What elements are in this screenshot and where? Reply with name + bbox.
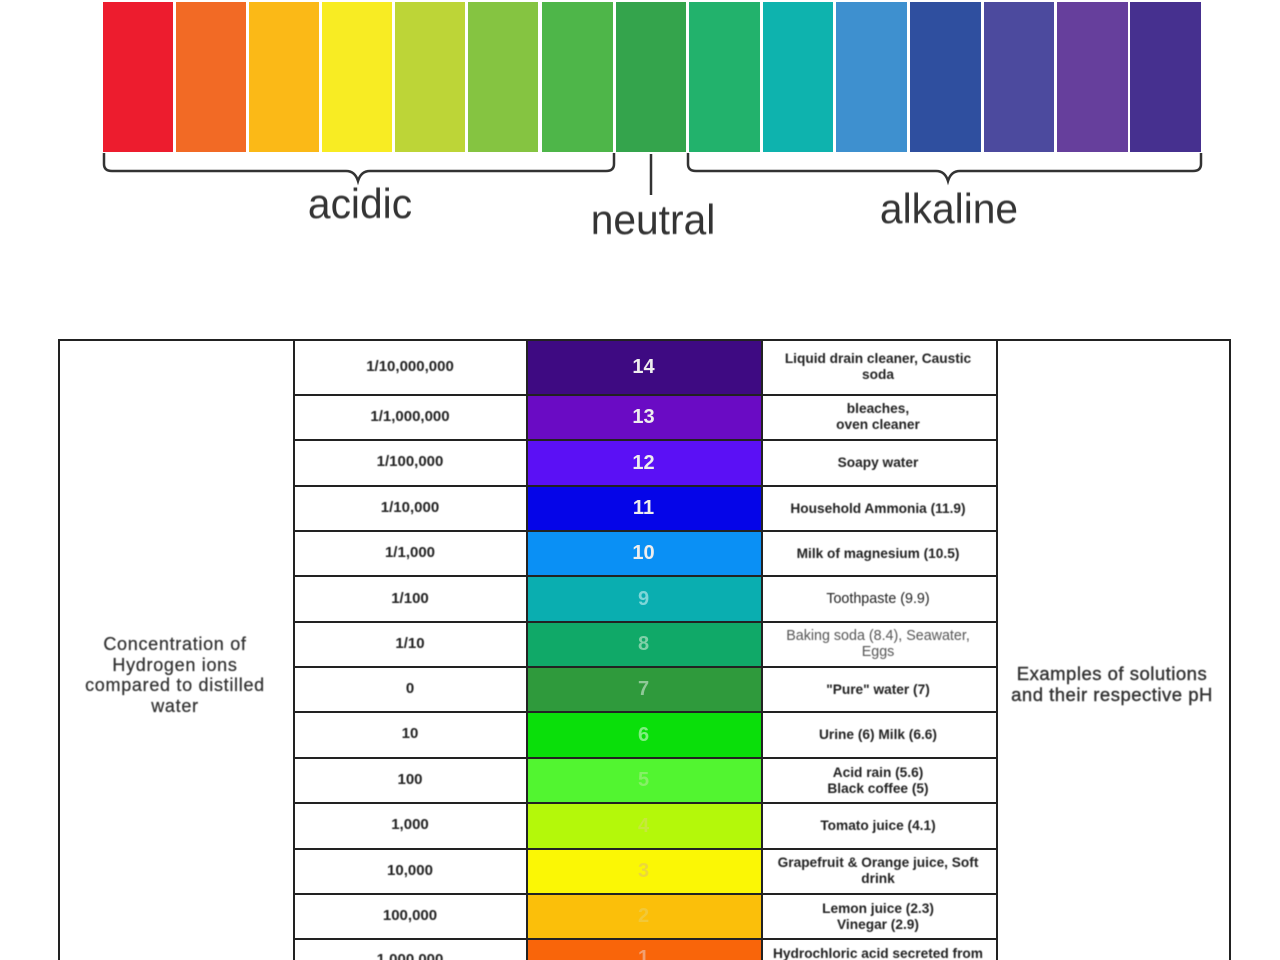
pH table: [58, 339, 1231, 960]
pH table: Eggs: [862, 644, 894, 660]
pH table: Acid rain (5.6): [833, 764, 923, 780]
pH table: 6: [638, 724, 649, 746]
pH table: Household Ammonia (11.9): [790, 500, 966, 516]
pH table: 10: [632, 542, 655, 564]
pH table: water: [151, 696, 199, 716]
pH table: 7: [638, 678, 649, 700]
pH table: and their respective pH: [1011, 684, 1213, 705]
pH table: Concentration of: [103, 634, 247, 654]
pH table: Hydrogen ions: [112, 654, 238, 674]
pH table: 100,000: [383, 906, 437, 924]
pH table: 100: [397, 770, 423, 788]
pH table: Tomato juice (4.1): [820, 818, 936, 833]
pH table: 1/100,000: [377, 453, 443, 470]
pH table: 1/1,000,000: [370, 408, 450, 424]
pH table: Baking soda (8.4), Seawater,: [786, 628, 970, 644]
pH table: 1/100: [391, 590, 429, 607]
pH table: 3: [638, 860, 649, 882]
label: acidic: acidic: [308, 180, 412, 227]
pH table: 1/10,000,000: [366, 358, 454, 374]
pH table: drink: [861, 870, 895, 886]
pH table: 4: [638, 814, 649, 836]
pH table: Milk of magnesium (10.5): [797, 546, 959, 560]
pH table: Urine (6) Milk (6.6): [819, 727, 937, 742]
pH colour scale: [103, 2, 1201, 152]
pH table: Vinegar (2.9): [837, 916, 919, 932]
pH table: Soapy water: [838, 455, 918, 470]
pH table: 9: [638, 588, 649, 610]
pH table: 1/10: [395, 634, 425, 652]
pH table: 11: [633, 497, 654, 519]
pH table: 8: [638, 633, 649, 655]
label: alkaline: alkaline: [880, 185, 1018, 232]
pH table: Examples of solutions: [1017, 663, 1207, 684]
pH table: 1/1,000: [385, 544, 435, 560]
pH table: Black coffee (5): [827, 780, 929, 796]
pH table: soda: [862, 366, 894, 382]
pH table: 0: [406, 680, 414, 696]
pH table: 5: [638, 769, 649, 791]
pH table: bleaches,: [847, 400, 909, 416]
pH table: Lemon juice (2.3): [822, 900, 934, 916]
pH table: Toothpaste (9.9): [826, 591, 930, 607]
pH table: Grapefruit & Orange juice, Soft: [778, 854, 978, 870]
pH table: 1/10,000: [381, 498, 439, 516]
pH table: 10,000: [387, 862, 433, 878]
pH table: 1,000: [391, 816, 429, 833]
pH table: 13: [632, 406, 655, 428]
pH table: 12: [632, 452, 655, 474]
pH table: 2: [638, 905, 649, 927]
pH table: compared to distilled: [85, 675, 265, 695]
pH table: oven cleaner: [836, 416, 920, 432]
pH table: 14: [632, 356, 655, 378]
pH table: "Pure" water (7): [826, 682, 930, 696]
pH table: 10: [402, 725, 418, 742]
pH table: Liquid drain cleaner, Caustic: [785, 350, 971, 366]
scale brackets: [102, 153, 1202, 195]
label: neutral: neutral: [591, 196, 715, 243]
